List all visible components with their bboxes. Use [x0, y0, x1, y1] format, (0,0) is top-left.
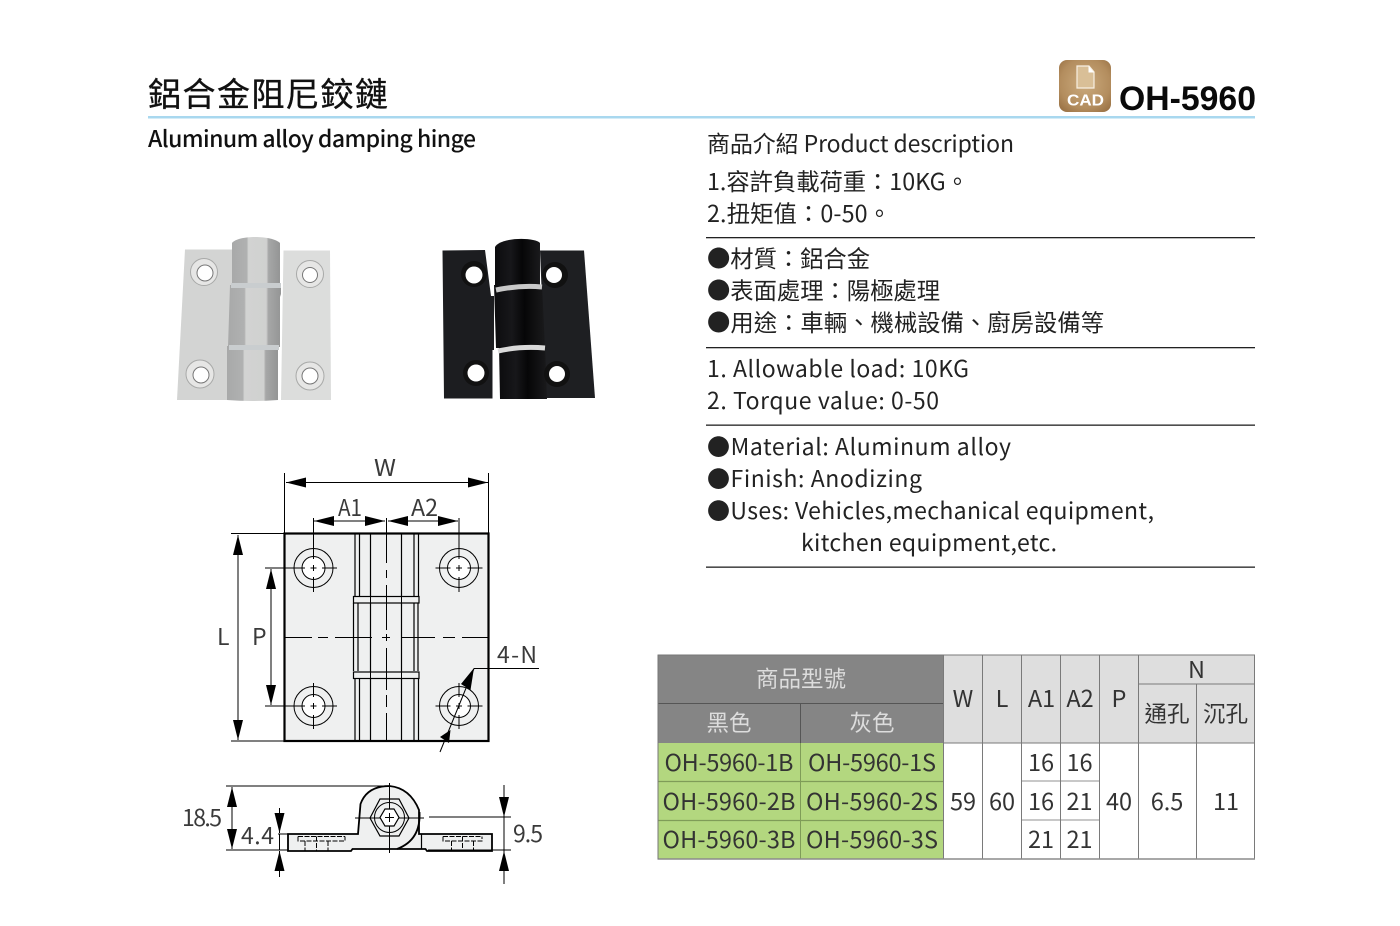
table header: dimensions: N [1188, 651, 1205, 685]
table body: dimension values: 21 [1028, 821, 1054, 855]
table header: dimensions: 沉孔 [1203, 697, 1248, 729]
description: English load and torque: 2. Torque value: 0-50 [707, 382, 939, 416]
mounting holes [290, 544, 482, 729]
table body: dimension values: 60 [989, 783, 1015, 817]
description: English spec bullets [707, 428, 1154, 558]
description: English spec bullets: ●Finish: Anodizing [707, 460, 922, 494]
front view labels: P [252, 618, 267, 652]
table header: dimensions: A1 [1028, 680, 1055, 714]
front view drawing [231, 473, 539, 752]
table header: dimensions: 通孔 [1144, 697, 1190, 729]
front view labels: 4-N [497, 636, 537, 670]
table header: model: 黑色 [706, 706, 752, 738]
front view labels: L [217, 618, 230, 652]
table body: dimension values: 11 [1213, 783, 1239, 817]
table body: model numbers: OH-5960-3B [662, 821, 796, 855]
table header: model [658, 654, 944, 743]
description: English spec bullets: kitchen equipment,etc. [801, 524, 1057, 558]
description: Chinese spec bullets: ●用途：車輛、機械設備、廚房設備等 [707, 304, 1104, 338]
side view labels: 4.4 [241, 817, 274, 851]
table body: model numbers: OH-5960-3S [806, 821, 938, 855]
description: Chinese intro: 2.扭矩值：0-50。 [707, 195, 891, 229]
description: English load and torque [707, 350, 969, 416]
spec table [658, 651, 1255, 859]
side view dimension lines [226, 785, 511, 884]
table body: dimension values: 16 [1066, 744, 1093, 778]
front view labels: W [374, 449, 396, 483]
table header: dimensions: W [953, 680, 973, 714]
icon: CAD badge: CAD [1067, 92, 1104, 110]
table header: model: 商品型號 [756, 662, 846, 694]
model number: OH-5960 [1119, 80, 1256, 118]
table body: dimension values: 21 [1066, 821, 1093, 855]
side view drawing [226, 783, 511, 884]
table header: dimensions: A2 [1066, 680, 1094, 714]
table body: model numbers: OH-5960-1B [664, 744, 794, 778]
photo: silver hinge [177, 237, 331, 401]
table body: dimension values [950, 744, 1239, 855]
description: Chinese intro [707, 125, 1014, 229]
photo: black hinge [442, 239, 595, 399]
table body: model numbers [658, 743, 944, 859]
icon: CAD badge [1059, 60, 1111, 112]
table body: model numbers: OH-5960-1S [808, 744, 936, 778]
description: Chinese spec bullets: ●表面處理：陽極處理 [707, 272, 940, 306]
table body: dimension values: 59 [950, 783, 976, 817]
dimension lines [231, 473, 539, 752]
description: Chinese intro: 1.容許負載荷重：10KG。 [707, 163, 969, 197]
table header: model: 灰色 [849, 706, 895, 738]
description: Chinese intro: 商品介紹 Product description [707, 125, 1014, 159]
header rule [148, 116, 1255, 118]
side view labels: 18.5 [182, 799, 222, 833]
description: Chinese spec bullets: ●材質：鋁合金 [707, 240, 870, 274]
table body: dimension values: 6.5 [1151, 783, 1183, 817]
side view labels [182, 799, 543, 851]
description: English load and torque: 1. Allowable load: 10KG [707, 350, 969, 384]
subtitle: Aluminum alloy damping hinge [148, 120, 476, 154]
table body: dimension values: 16 [1028, 783, 1054, 817]
description: English spec bullets: ●Material: Aluminum alloy [707, 428, 1011, 462]
table body: dimension values: 16 [1028, 744, 1054, 778]
description: Chinese spec bullets [707, 240, 1104, 338]
table header: dimensions: P [1112, 680, 1126, 714]
side view labels: 9.5 [513, 815, 543, 849]
front view labels: A1 [338, 489, 362, 523]
table header: dimensions: L [996, 680, 1009, 714]
table body: dimension values: 21 [1066, 783, 1093, 817]
table header: dimensions [944, 651, 1255, 743]
table body: dimension values: 40 [1106, 783, 1132, 817]
description: English spec bullets: ●Uses: Vehicles,mechanical equipment, [707, 492, 1154, 526]
front view labels [217, 449, 537, 670]
title: 鋁合金阻尼鉸鏈 [148, 68, 388, 116]
table body: model numbers: OH-5960-2S [806, 783, 938, 817]
table body: model numbers: OH-5960-2B [662, 783, 796, 817]
front view labels: A2 [411, 489, 438, 523]
